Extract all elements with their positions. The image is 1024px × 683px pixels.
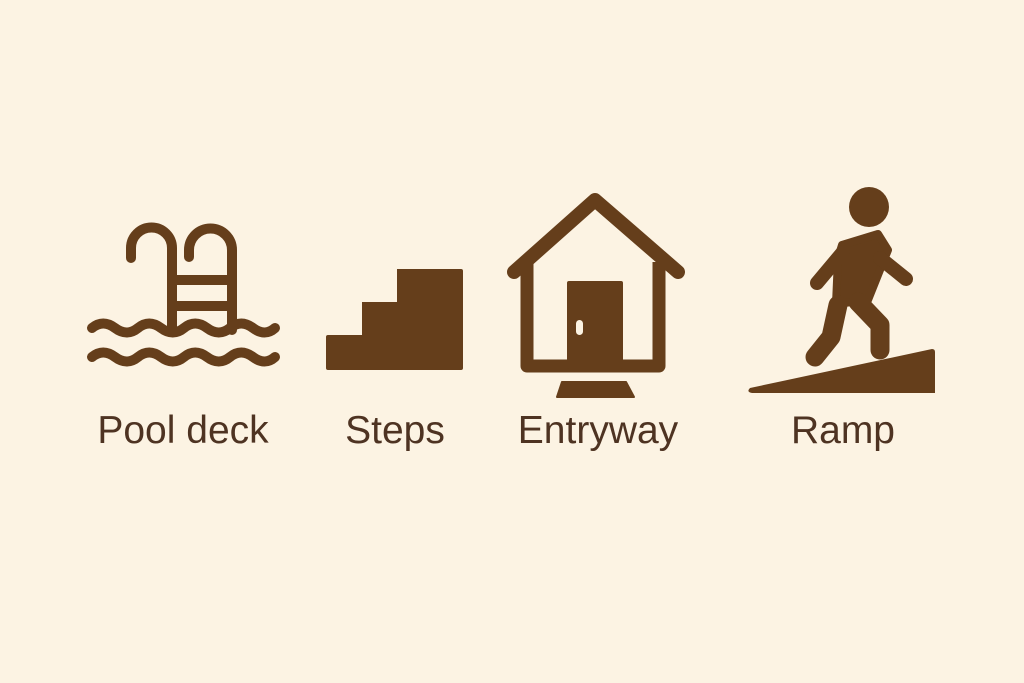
icon: pool ladder with water [92,228,275,362]
icon: person walking up ramp [748,187,935,393]
label: Ramp: Ramp [791,409,895,452]
icon: house entryway [514,200,678,397]
icon: steps [326,269,463,370]
label: Pool deck: Pool deck [97,409,269,452]
label: Entryway: Entryway [518,409,679,452]
label: Steps: Steps [345,409,445,452]
